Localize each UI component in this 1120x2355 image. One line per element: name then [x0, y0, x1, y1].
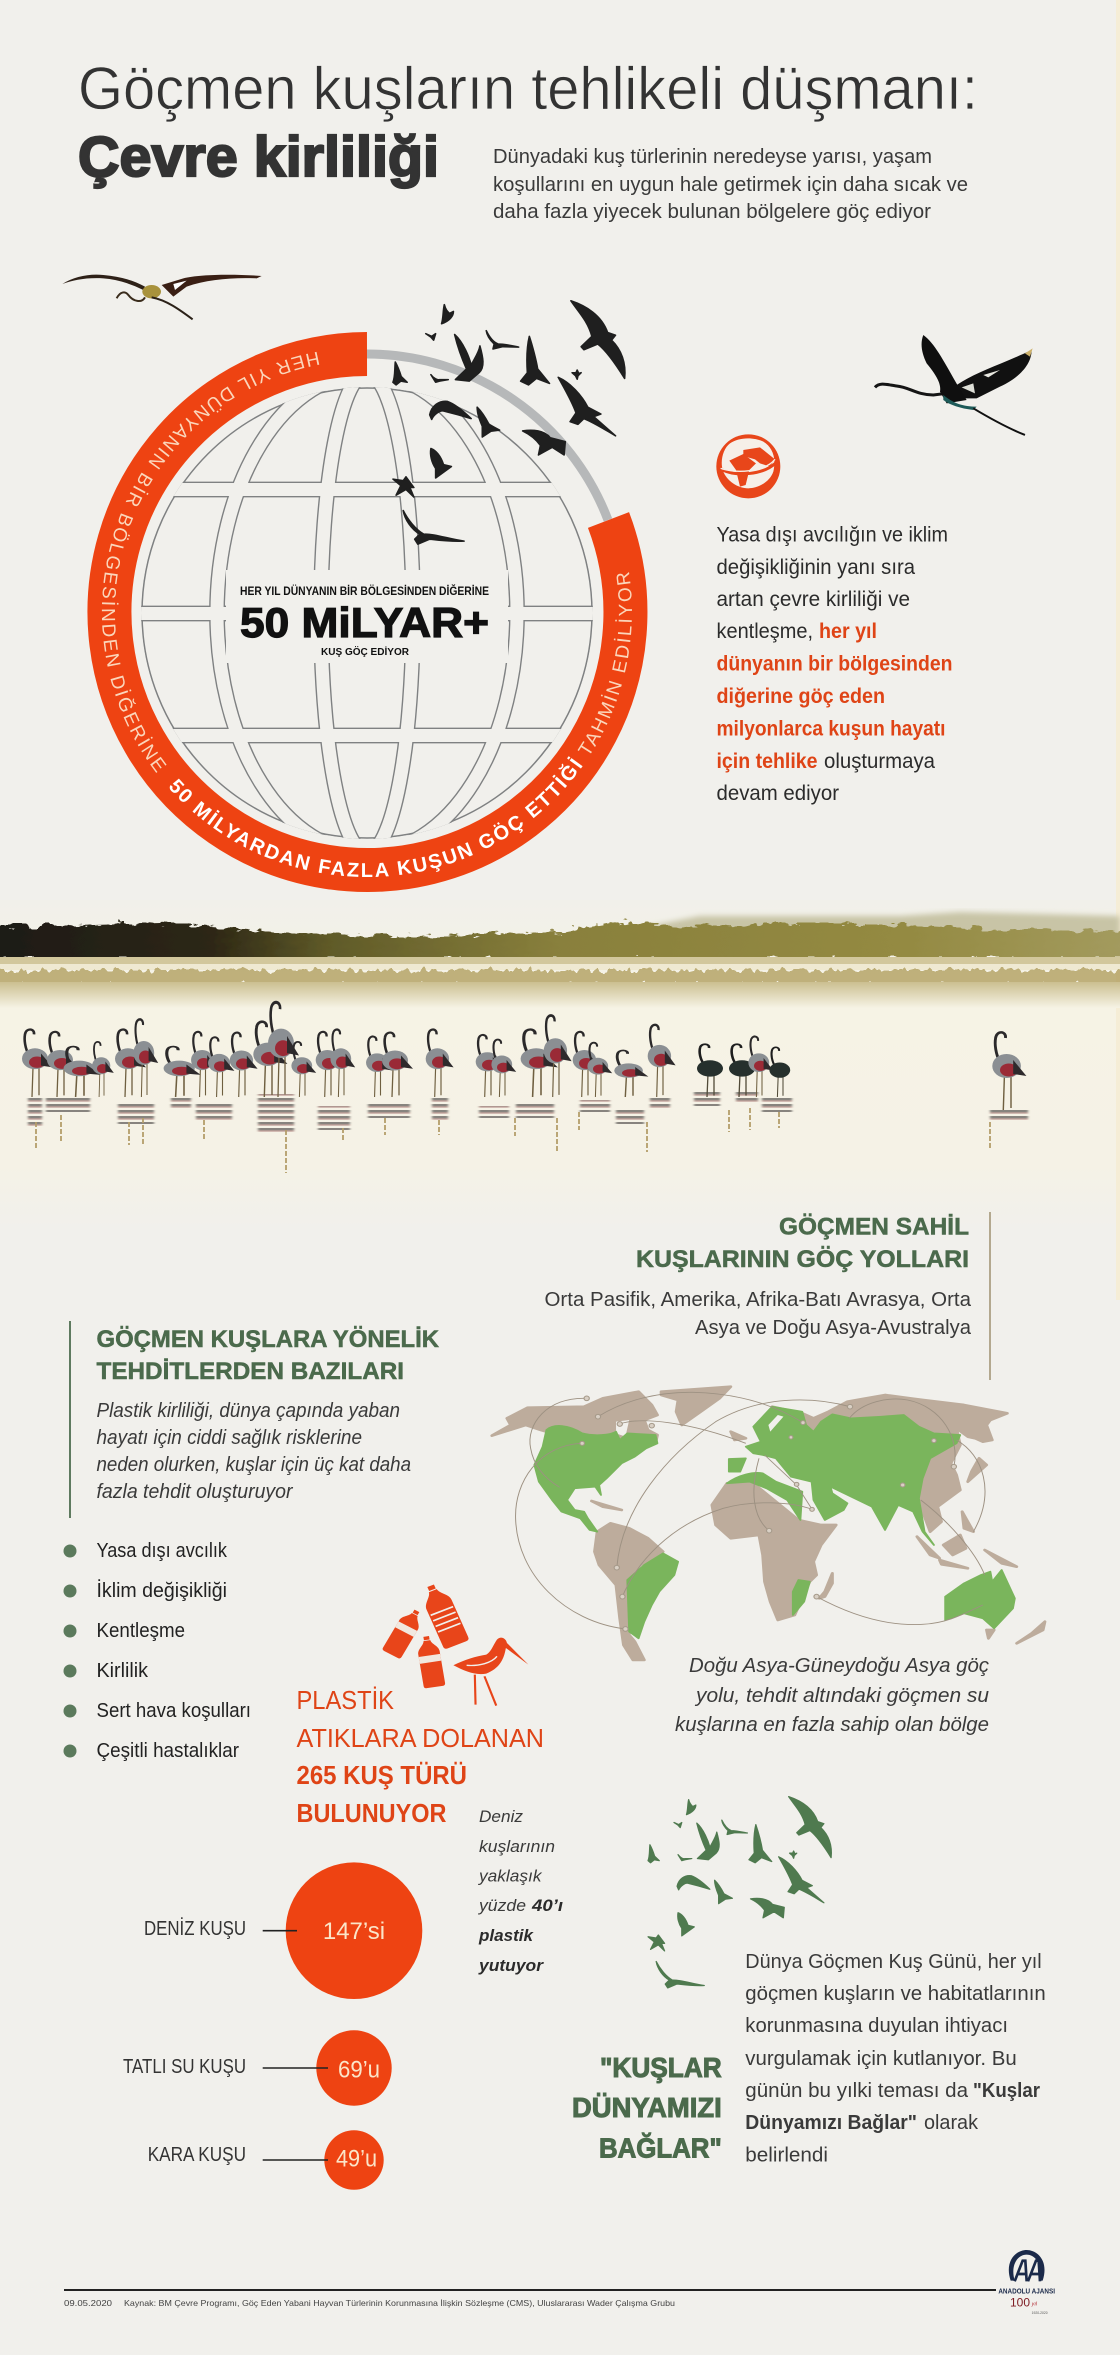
- list: threats: Kirlilik: [96, 1660, 149, 1682]
- text: world migratory bird day: göçmen kuşların ve habitatlarının: [745, 1983, 1046, 2005]
- globe centre stat: 50 MiLYAR+: [240, 599, 489, 646]
- logo: Anadolu Ajansı: ANADOLU AJANSI: [998, 2286, 1055, 2295]
- heading: theme quote: DÜNYAMIZI: [572, 2092, 722, 2123]
- text: world migratory bird day: [745, 1951, 1046, 2166]
- intro text: Dünyadaki kuş türlerinin neredeyse yarısı, yaşam: [493, 146, 932, 168]
- text block: threats summary: devam ediyor: [716, 782, 839, 805]
- globe centre stat: HER YIL DÜNYANIN BİR BÖLGESİNDEN DİĞERİNE: [240, 585, 489, 598]
- text: route list: [544, 1289, 972, 1339]
- heading: threats: [96, 1326, 440, 1385]
- footer rule: [64, 2289, 996, 2291]
- footer source: 09.05.2020: [64, 2298, 112, 2308]
- text: sea birds note: 40’ı: [531, 1896, 563, 1915]
- text: route list: Asya ve Doğu Asya-Avustralya: [695, 1317, 972, 1339]
- logo: Anadolu Ajansı: [998, 2250, 1055, 2315]
- map: Hudson Bay: [616, 1420, 629, 1437]
- list: threats: Kentleşme: [96, 1620, 185, 1642]
- divider: threats: [69, 1321, 71, 1518]
- icon: globe badge: [716, 434, 780, 498]
- text: world migratory bird day: Dünya Göçmen Kuş Günü, her yıl: [745, 1951, 1042, 1973]
- text: map note: [675, 1655, 989, 1736]
- heading: plastic waste: [296, 1685, 544, 1828]
- bubble: sea birds: [144, 1862, 422, 1999]
- intro text: [493, 146, 968, 223]
- text: sea birds note: yaklaşık: [478, 1866, 543, 1886]
- title: Çevre kirliliği: [78, 125, 439, 189]
- heading: threats: TEHDİTLERDEN BAZILARI: [96, 1358, 404, 1385]
- ring text: HER YIL DÜNYANIN BİR BÖLGESİNDEN DİĞERİNE: [102, 352, 320, 773]
- text: threats intro: fazla tehdit oluşturuyor: [96, 1481, 294, 1503]
- map: route points: [580, 1396, 956, 1631]
- text: sea birds note: Deniz: [479, 1807, 524, 1826]
- icon: plastic bottles and shorebird: [382, 1581, 528, 1706]
- ring: grey remainder arc: [367, 354, 608, 520]
- text: sea birds note: yutuyor: [478, 1956, 544, 1975]
- map: Baltic sea: [768, 1415, 783, 1432]
- ring text: [102, 352, 632, 877]
- globe wireframe: [141, 387, 593, 839]
- globe chart with ring: [87, 300, 648, 892]
- text: world migratory bird day: belirlendi: [745, 2144, 828, 2166]
- flamingo reflections: [28, 1092, 1028, 1173]
- text: world migratory bird day: korunmasına duyulan ihtiyacı: [745, 2015, 1008, 2037]
- heading: shorebird routes: KUŞLARININ GÖÇ YOLLARI: [636, 1246, 969, 1273]
- flamingo group: [22, 1002, 1026, 1110]
- icon: green bird flock: [648, 1797, 831, 1988]
- heading: shorebird routes: GÖÇMEN SAHİL: [779, 1214, 969, 1240]
- text block: threats summary: Yasa dışı avcılığın ve iklim: [716, 524, 948, 546]
- text: world migratory bird day: vurgulamak için kutlanıyor. Bu: [745, 2048, 1017, 2070]
- list: threats: [64, 1540, 251, 1762]
- globe centre stat: KUŞ GÖÇ EDİYOR: [321, 645, 409, 658]
- text: world migratory bird day: "Kuşlar: [973, 2080, 1040, 2102]
- text: world migratory bird day: Dünyamızı Bağlar": [745, 2112, 917, 2134]
- list: threats: Sert hava koşulları: [96, 1700, 251, 1722]
- logo: Anadolu Ajansı: yıl: [1031, 2301, 1038, 2307]
- map: highlighted regions: [534, 1407, 1015, 1638]
- text block: threats summary: artan çevre kirliliği ve: [716, 588, 910, 611]
- heading: plastic waste: ATIKLARA DOLANAN: [296, 1723, 544, 1753]
- text block: threats summary: dünyanın bir bölgesinden: [716, 652, 952, 676]
- heading: plastic waste: BULUNUYOR: [296, 1798, 447, 1828]
- text block: threats summary: diğerine göç eden: [716, 685, 885, 708]
- logo: Anadolu Ajansı: 1920-2020: [1032, 2311, 1048, 2315]
- divider: routes: [989, 1212, 991, 1380]
- text block: threats summary: için tehlike: [716, 750, 818, 773]
- text: route list: Orta Pasifik, Amerika, Afrika-Batı Avrasya, Orta: [544, 1289, 972, 1311]
- bubble: freshwater birds: TATLI SU KUŞU: [123, 2056, 246, 2078]
- text: world migratory bird day: günün bu yılki teması da: [745, 2080, 969, 2102]
- bubble: sea birds: 147’si: [323, 1918, 385, 1945]
- photo: lake with flamingos: [0, 900, 1120, 1230]
- heading: theme quote: "KUŞLAR: [600, 2052, 722, 2083]
- ring text: 50 MİLYARDAN FAZLA KUŞUN GÖÇ ETTİĞİ: [170, 756, 583, 877]
- icon: flying flamingo left: [62, 275, 262, 319]
- text: threats intro: hayatı için ciddi sağlık risklerine: [96, 1427, 362, 1449]
- text: threats intro: neden olurken, kuşlar için üç kat daha: [96, 1454, 411, 1476]
- bubble: land birds: KARA KUŞU: [148, 2144, 246, 2166]
- intro text: daha fazla yiyecek bulunan bölgelere göç ediyor: [493, 201, 931, 223]
- title: Göçmen kuşların tehlikeli düşmanı:: [78, 55, 978, 122]
- text: threats intro: Plastik kirliliği, dünya çapında yaban: [96, 1400, 400, 1422]
- text: sea birds note: kuşlarının: [479, 1837, 555, 1856]
- heading: plastic waste: PLASTİK: [296, 1685, 395, 1715]
- icon: flying flamingo right: [875, 335, 1033, 435]
- text: sea birds note: plastik: [478, 1926, 535, 1945]
- heading: plastic waste: 265 KUŞ TÜRÜ: [296, 1760, 467, 1790]
- bubble: freshwater birds: 69’u: [338, 2056, 380, 2084]
- text: threats intro: [96, 1400, 411, 1503]
- list: threats: Yasa dışı avcılık: [96, 1540, 228, 1562]
- text block: threats summary: değişikliğinin yanı sıra: [716, 556, 915, 579]
- globe centre stat: [240, 585, 489, 658]
- text: sea birds note: yüzde: [478, 1896, 526, 1915]
- title: [78, 55, 978, 189]
- text block: threats summary: [716, 524, 952, 805]
- text block: threats summary: kentleşme,: [716, 620, 813, 643]
- text: map note: kuşlarına en fazla sahip olan bölge: [675, 1714, 989, 1736]
- text: sea birds note: [478, 1807, 563, 1975]
- map: land: [492, 1387, 1045, 1660]
- footer source: Kaynak: BM Çevre Programı, Göç Eden Yabani Hayvan Türlerinin Korunmasına İlişkin Sözleşme (CMS), Uluslararası Wader Çalışma Grubu: [124, 2298, 675, 2308]
- heading: theme quote: BAĞLAR": [599, 2132, 722, 2164]
- ring text: TAHMİN EDİLİYOR: [578, 572, 632, 754]
- map: migration routes: [516, 1392, 985, 1629]
- icon: black bird flock: [393, 301, 625, 544]
- text block: threats summary: her yıl: [819, 620, 877, 643]
- heading: threats: GÖÇMEN KUŞLARA YÖNELİK: [96, 1326, 440, 1353]
- world map with routes: [492, 1387, 1045, 1660]
- text: map note: Doğu Asya-Güneydoğu Asya göç: [689, 1655, 989, 1677]
- logo: Anadolu Ajansı: 100: [1010, 2296, 1030, 2310]
- bubble: freshwater birds: [123, 2030, 392, 2106]
- list: threats: Çeşitli hastalıklar: [96, 1740, 239, 1762]
- text: map note: yolu, tehdit altındaki göçmen su: [694, 1685, 989, 1707]
- heading: theme quote: [572, 2052, 722, 2164]
- ring: orange arc: [109, 354, 625, 870]
- bubble: land birds: 49’u: [336, 2146, 377, 2172]
- text block: threats summary: oluşturmaya: [824, 750, 935, 773]
- bubble: sea birds: DENİZ KUŞU: [144, 1917, 246, 1940]
- bubble: land birds: [148, 2130, 384, 2190]
- text block: threats summary: milyonlarca kuşun hayatı: [716, 718, 946, 740]
- text: world migratory bird day: olarak: [924, 2112, 979, 2134]
- heading: shorebird routes: [636, 1214, 969, 1273]
- list: threats: İklim değişikliği: [96, 1579, 227, 1602]
- intro text: koşullarını en uygun hale getirmek için daha sıcak ve: [493, 174, 968, 196]
